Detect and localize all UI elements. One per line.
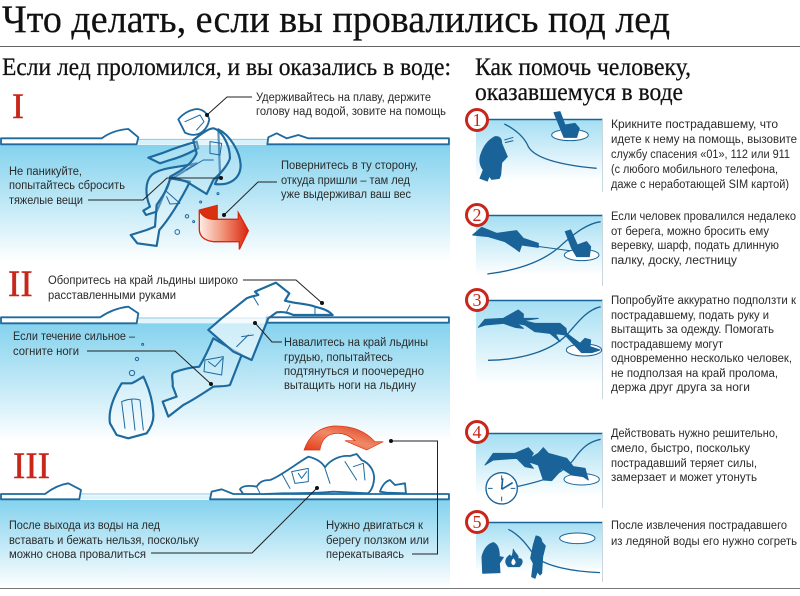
callout: crawl to shore: [326, 439, 438, 561]
dropped backpack: [110, 377, 153, 438]
callout: turn: Повернитесь в ту сторону,: [281, 160, 418, 172]
callout: lean on ice: [48, 275, 324, 305]
callout: no panic: Не паникуйте,: [9, 166, 82, 178]
text 4: смело, быстро, поскольку: [611, 443, 750, 455]
figure: person in water: [131, 109, 241, 246]
text 5: из ледяной воды его нужно согреть: [611, 536, 797, 548]
ice with hole: [1, 129, 449, 145]
illustration 1: [476, 112, 603, 192]
callout: turn: уже выдерживал ваш вес: [281, 189, 411, 201]
text 3: Попробуйте аккуратно подползти к: [611, 295, 797, 307]
text 1: (с любого мобильного телефона,: [611, 164, 778, 176]
help step 3: [466, 290, 797, 399]
numeral III: III: [13, 446, 50, 487]
arrow: turn back: [199, 205, 248, 249]
text 1: службу спасения «01», 112 или 911: [611, 149, 790, 161]
callout: do not stand: После выхода из воды на лед: [9, 520, 160, 532]
text 1: Крикните пострадавшему, что: [611, 119, 778, 131]
heading: how to help: оказавшемуся в воде: [475, 79, 683, 106]
text 5: [611, 520, 797, 548]
text 4: пострадавший теряет силы,: [611, 458, 757, 470]
badge 2: 2: [472, 205, 482, 225]
text 5: После извлечения пострадавшего: [611, 520, 787, 532]
callout: no panic: попытайтесь сбросить: [9, 180, 125, 192]
callout: bend legs: Если течение сильное –: [13, 331, 136, 343]
badge 5: [466, 512, 488, 532]
callout: turn: [222, 160, 418, 217]
text 3: вытащить за одежду. Помогать: [611, 324, 774, 336]
badge 3: [466, 290, 488, 310]
text 1: идете к нему на помощь, вызовите: [611, 134, 797, 146]
callout: stay afloat: голову над водой, зовите на помощь: [256, 106, 446, 118]
numeral II: II: [8, 264, 33, 305]
badge 2: [466, 204, 488, 226]
callout: lean on ice: Обопритесь на край льдины широко: [48, 275, 238, 287]
panel: step III: [0, 426, 450, 588]
illustration 4: [476, 433, 603, 508]
callout: pull up: [253, 321, 428, 392]
callout: crawl to shore: берегу ползком или: [326, 535, 429, 547]
callout: pull up: вытащить ноги на льдину: [284, 380, 416, 392]
text 4: замерзает и может утонуть: [611, 472, 757, 484]
badge 3: 3: [472, 290, 482, 310]
text 2: [611, 211, 796, 267]
text 4: [611, 428, 778, 484]
numeral I: I: [12, 86, 24, 126]
callout: do not stand: [9, 486, 319, 561]
text 3: держа друг друга за ноги: [611, 382, 750, 394]
callout: pull up: Навалитесь на край льдины: [284, 337, 428, 349]
badge 1: [466, 110, 488, 130]
help step 2: [466, 204, 796, 286]
ice surface: [1, 483, 449, 499]
callout: turn: откуда пришли – там лед: [281, 175, 410, 187]
arrow: crawl: [304, 426, 383, 450]
bubbles: [175, 193, 219, 234]
callout: pull up: подтянуться и поочередно: [284, 366, 424, 378]
text 3: [611, 295, 797, 394]
text 3: не подползая на край пролома,: [611, 368, 778, 380]
figure: person on ice edge: [110, 283, 333, 438]
text 2: Если человек провалился недалеко: [611, 211, 796, 223]
illustration 3: [476, 300, 603, 399]
text 4: Действовать нужно решительно,: [611, 428, 778, 440]
figure: crawling person: [240, 454, 406, 494]
heading: how to help: [475, 54, 691, 106]
callout: no panic: [9, 166, 223, 207]
text 1: даже с неработающей SIM картой): [611, 179, 789, 191]
help step 5: [466, 512, 797, 582]
callout: lean on ice: расставленными руками: [48, 290, 176, 302]
callout: crawl to shore: перекатываясь: [326, 549, 404, 561]
ice edge: [1, 307, 449, 323]
panel: step I: [0, 86, 450, 261]
callout: bend legs: [13, 331, 213, 386]
callout: do not stand: можно снова провалиться: [9, 549, 146, 561]
text 3: пострадавшему могут: [611, 339, 724, 351]
panel: step II: [0, 264, 450, 441]
text 2: палку, доску, лестницу: [611, 255, 737, 267]
text 3: пострадавшему, подать руку и: [611, 310, 769, 322]
help step 4: [466, 422, 778, 508]
heading: how to help: Как помочь человеку,: [475, 54, 691, 81]
illustration 5: [476, 522, 603, 582]
text 2: от берега, можно бросить ему: [611, 226, 769, 238]
callout: stay afloat: Удерживайтесь на плаву, держите: [256, 92, 431, 104]
callout: bend legs: согните ноги: [13, 346, 79, 358]
badge 5: 5: [472, 512, 482, 532]
badge 1: 1: [472, 110, 482, 130]
callout: stay afloat: [205, 92, 446, 118]
text 3: одновременно несколько человек,: [611, 353, 792, 365]
illustration 2: [473, 215, 603, 286]
heading: in the water: Если лед проломился, и вы оказались в воде:: [2, 54, 451, 81]
text 2: веревку, шарф, подать длинную: [611, 240, 779, 252]
badge 4: [466, 422, 488, 442]
text 1: [611, 119, 797, 191]
callout: do not stand: вставать и бежать нельзя, поскольку: [9, 535, 199, 547]
bubbles: [129, 343, 144, 376]
help step 1: [466, 110, 797, 192]
callout: no panic: тяжелые вещи: [9, 195, 83, 207]
badge 4: 4: [472, 422, 482, 442]
callout: pull up: грудью, попытайтесь: [284, 352, 393, 364]
callout: crawl to shore: Нужно двигаться к: [326, 520, 424, 532]
